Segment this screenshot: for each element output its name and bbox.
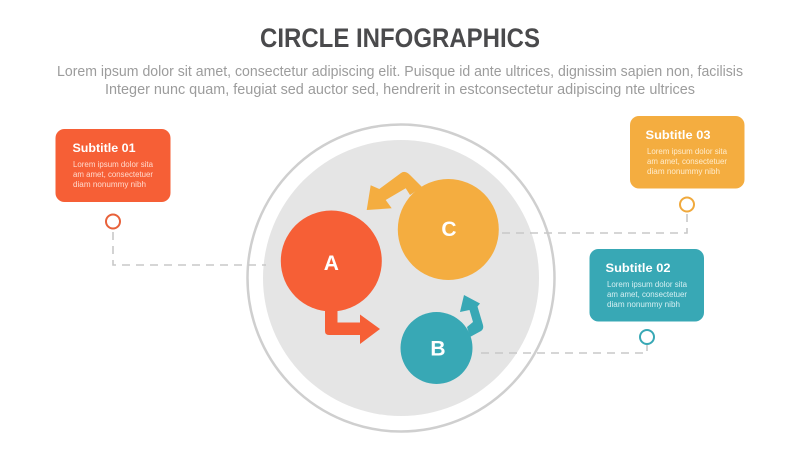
panel: subtitle 02: am amet, consectetuer xyxy=(607,290,687,299)
circle B xyxy=(400,312,472,384)
panel: subtitle 02: diam nonummy nibh xyxy=(607,300,680,309)
inner gray disc xyxy=(263,140,539,416)
connector: subtitle 01 xyxy=(113,232,266,265)
panel: subtitle 01: diam nonummy nibh xyxy=(73,180,146,189)
panel: subtitle 01 xyxy=(56,129,170,202)
panel: subtitle 03: diam nonummy nibh xyxy=(647,167,720,176)
panel: subtitle 03: am amet, consectetuer xyxy=(647,157,727,166)
panel: subtitle 01: Subtitle 01 xyxy=(72,143,136,155)
panel: subtitle 02 xyxy=(590,249,704,322)
marker: subtitle 03 xyxy=(680,198,694,212)
panel: subtitle 03: Subtitle 03 xyxy=(646,130,710,142)
arrow: A to B xyxy=(325,305,380,344)
description text: Integer nunc quam, feugiat sed auctor sed, hendrerit in estconsectetur adipiscing nte ultrices xyxy=(105,82,695,98)
marker: subtitle 01 xyxy=(106,214,120,228)
panel: subtitle 02: Subtitle 02 xyxy=(606,263,670,275)
panel: subtitle 02: Lorem ipsum dolor sita xyxy=(607,280,688,289)
circle C xyxy=(398,179,499,280)
connector: subtitle 02 xyxy=(481,345,647,353)
circle B: B xyxy=(430,338,446,360)
description text xyxy=(57,64,743,98)
panel: subtitle 03 xyxy=(630,116,744,188)
arrow: B to C xyxy=(460,295,483,337)
circle A xyxy=(281,210,382,312)
circle C: C xyxy=(441,218,457,241)
connector: subtitle 03 xyxy=(502,213,687,233)
marker: subtitle 02 xyxy=(640,330,654,344)
arrow: C to A xyxy=(367,172,422,210)
panel: subtitle 01: Lorem ipsum dolor sita xyxy=(73,160,154,169)
panel: subtitle 03: Lorem ipsum dolor sita xyxy=(647,147,728,156)
title: CIRCLE INFOGRAPHICS xyxy=(260,23,540,53)
description text: Lorem ipsum dolor sit amet, consectetur adipiscing elit. Puisque id ante ultrices, dignissim sapien non, facilisis xyxy=(57,64,743,80)
outer ring xyxy=(248,124,554,432)
circle A: A xyxy=(324,252,339,275)
panel: subtitle 01: am amet, consectetuer xyxy=(73,170,153,179)
